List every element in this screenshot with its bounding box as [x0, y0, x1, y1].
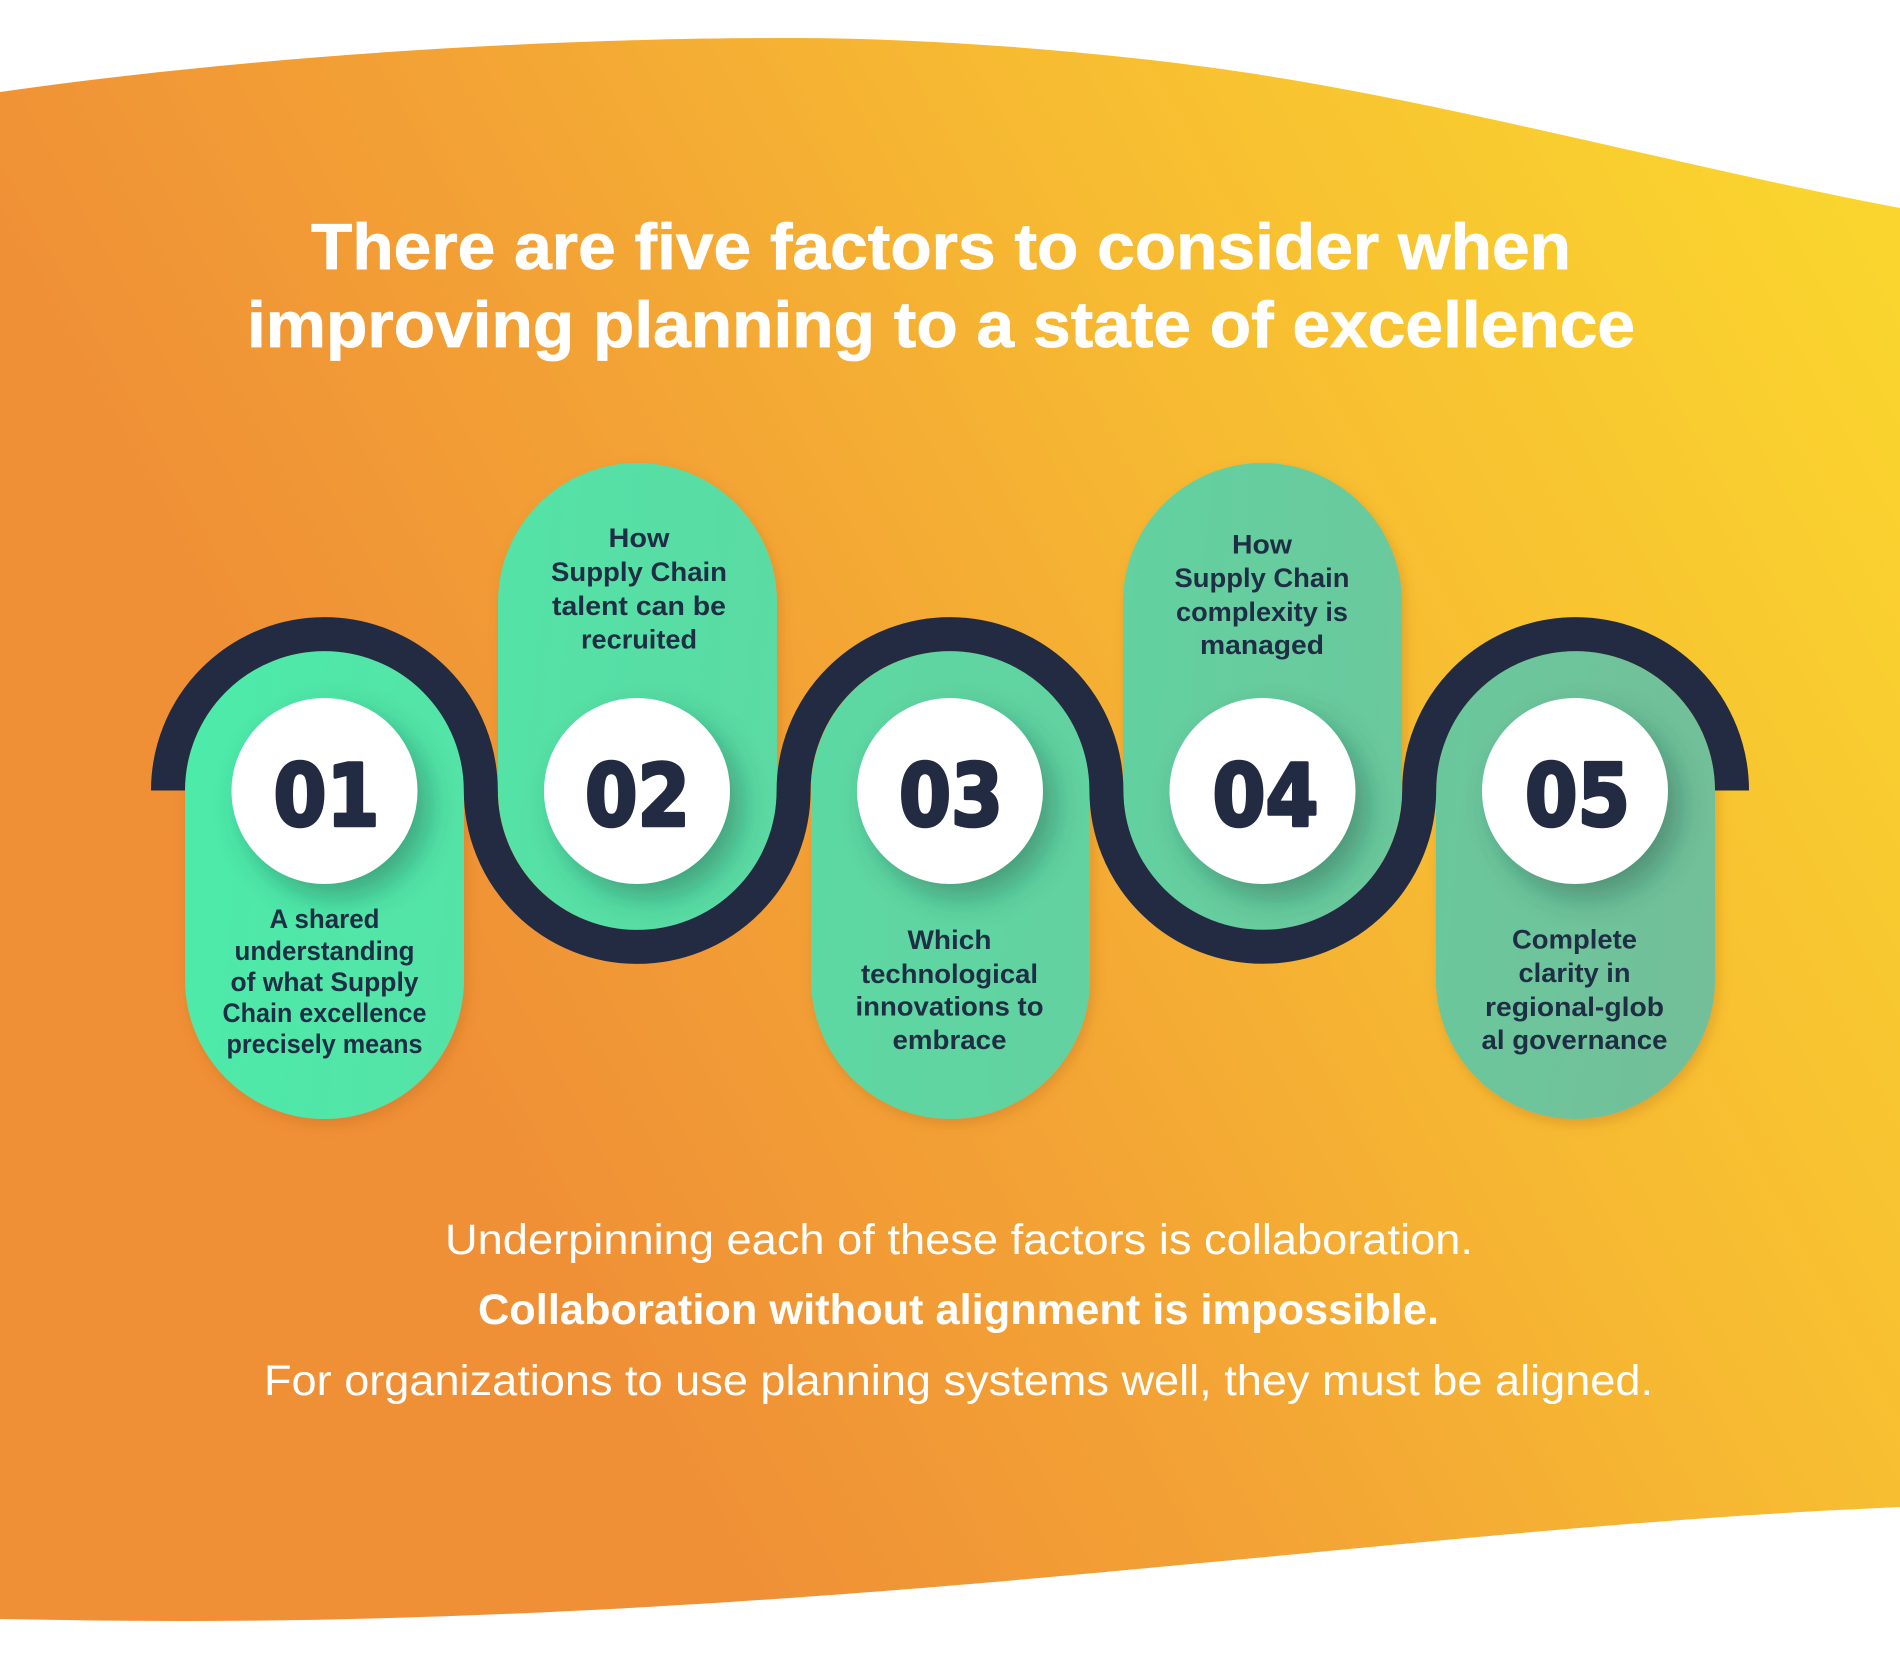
text 05 [1482, 924, 1668, 1055]
text 04: Supply Chain [1174, 563, 1350, 593]
title: improving planning to a state of excellence [247, 288, 1635, 361]
text 04: complexity is [1176, 597, 1348, 627]
text 03: innovations to [856, 992, 1044, 1022]
text 01: of what Supply [230, 967, 419, 997]
closing statement [264, 1216, 1653, 1405]
number badge 03: 03 [899, 746, 1003, 846]
title [247, 210, 1635, 361]
text 02: How [608, 523, 670, 553]
text 03: technological [861, 959, 1038, 989]
pill 3 [811, 651, 1090, 1119]
pill 2 [498, 463, 777, 930]
text 04: managed [1200, 630, 1324, 660]
title: There are five factors to consider when [311, 210, 1571, 283]
number badge 05: 05 [1525, 746, 1630, 846]
text 02: recruited [581, 624, 697, 654]
pill 1 [185, 651, 464, 1119]
text 01 [222, 904, 426, 1059]
number badge 03 [857, 698, 1043, 884]
text 01: A shared [270, 904, 380, 934]
text 05: Complete [1512, 924, 1637, 954]
number badge 04: 04 [1212, 746, 1318, 846]
step 05 [1482, 698, 1668, 1055]
step 02 [544, 523, 730, 884]
text 04: How [1232, 530, 1292, 560]
number badge 05 [1482, 698, 1668, 884]
text 01: Chain excellence [222, 998, 426, 1028]
number badge 01: 01 [274, 746, 380, 846]
closing statement: Underpinning each of these factors is collaboration. [445, 1216, 1473, 1264]
text 02: Supply Chain [551, 557, 727, 587]
pill 5 [1436, 651, 1715, 1119]
text 05: al governance [1482, 1025, 1668, 1055]
step 03 [856, 698, 1044, 1055]
text 05: regional-glob [1485, 992, 1664, 1022]
text 03: embrace [892, 1025, 1006, 1055]
text 01: understanding [234, 936, 414, 966]
number badge 01 [232, 698, 418, 884]
closing statement: For organizations to use planning systems well, they must be aligned. [264, 1357, 1653, 1405]
pills [185, 463, 1715, 1119]
text 04 [1174, 530, 1350, 660]
closing statement: Collaboration without alignment is impossible. [478, 1286, 1439, 1334]
step 01 [222, 698, 426, 1059]
text 05: clarity in [1518, 958, 1630, 988]
pill 4 [1123, 463, 1402, 930]
number badge 02 [544, 698, 730, 884]
step 04 [1170, 530, 1356, 884]
text 01: precisely means [226, 1029, 422, 1059]
wavy ribbon [168, 634, 1732, 947]
number badge 02: 02 [585, 746, 690, 846]
text 03 [856, 925, 1044, 1055]
text 02 [551, 523, 727, 654]
text 02: talent can be [552, 591, 726, 621]
text 03: Which [908, 925, 992, 955]
number badge 04 [1170, 698, 1356, 884]
